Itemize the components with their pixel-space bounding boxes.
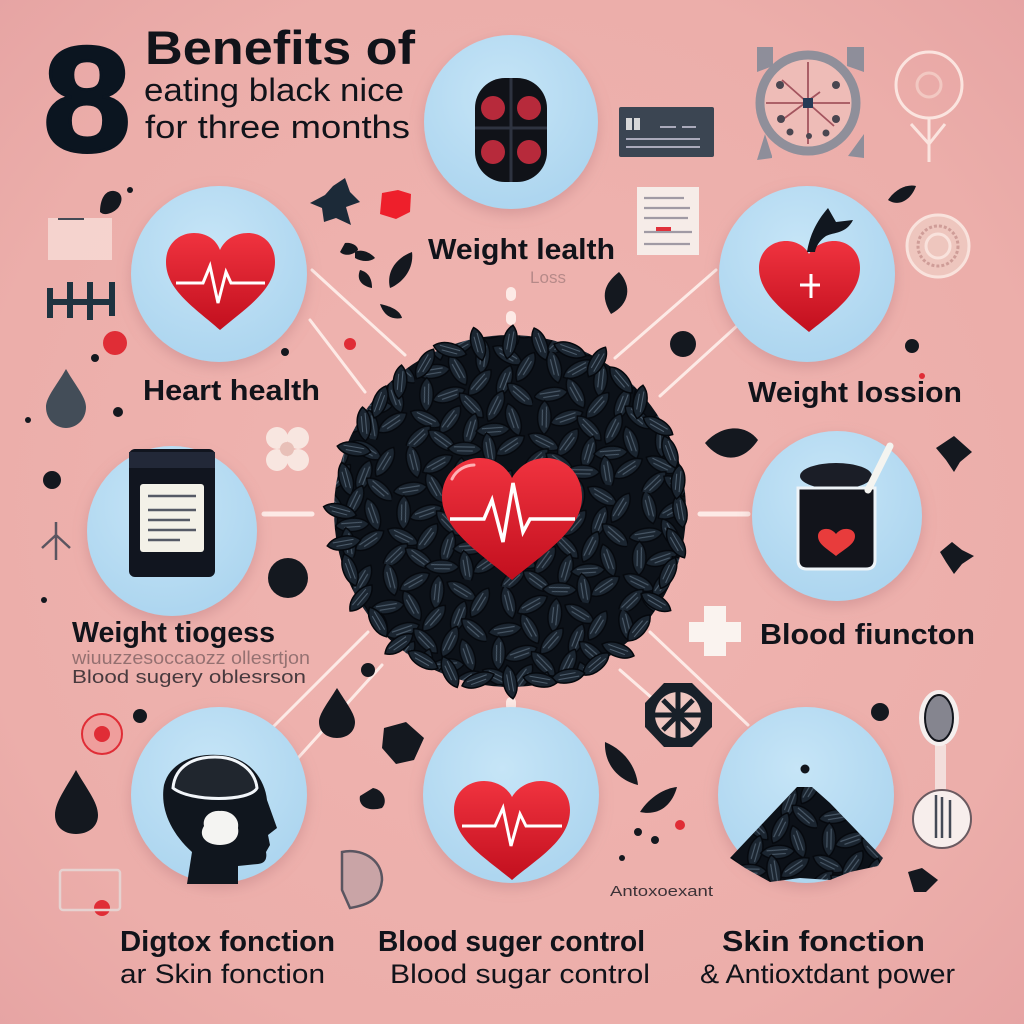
label: skin function [700, 926, 955, 989]
label: skin function: & Antioxtdant power [700, 959, 955, 989]
decorative flower [266, 427, 309, 471]
decorative spoon [913, 690, 971, 848]
label: blood sugar control: Blood sugar control [390, 959, 650, 989]
dark card [619, 107, 714, 157]
icon: heart [454, 781, 570, 880]
panel: jar [752, 431, 922, 601]
decorative cross [689, 606, 741, 656]
rice edge grains [322, 324, 690, 700]
sublabel: left: Blood sugery oblesrson [72, 667, 306, 687]
label: blood function: Blood fiuncton [760, 619, 975, 651]
label: digtox function [120, 926, 335, 989]
label: weight loss left: Weight tiogess [72, 617, 275, 649]
red splash [380, 190, 411, 219]
decorative drops and leaves [25, 186, 974, 892]
small label: antioxidant: Antoxoexant [610, 883, 714, 900]
title line 2: eating black nice [144, 72, 404, 108]
icon: jar [798, 446, 890, 569]
heading: weight health: Weight lealth [428, 234, 615, 266]
decorative wheel [645, 683, 712, 747]
panel: rice bag [87, 446, 257, 616]
panel: rice pile [718, 707, 894, 883]
left dark motif [50, 282, 112, 320]
connector lines [258, 270, 748, 758]
bottom motifs [42, 522, 382, 910]
label: digtox function: Digtox fonction [120, 926, 335, 958]
icon: heart [166, 233, 275, 330]
label: heart health: Heart health [143, 375, 320, 407]
panel: apple heart [719, 186, 895, 362]
title numeral: 8 [43, 15, 131, 183]
panel: head [131, 707, 307, 884]
title [43, 15, 415, 183]
icon: rice pile [730, 787, 883, 882]
sublabel: left [71, 648, 310, 687]
decorative flower outline [896, 52, 962, 162]
panel: heart health [131, 186, 307, 362]
panel: top brain [424, 35, 598, 209]
label: skin function: Skin fonction [722, 926, 925, 958]
sublabel: left: wiuuzzesoccaozz ollesrtjon [71, 648, 310, 668]
red accents [82, 331, 925, 916]
label: blood sugar control [378, 926, 650, 989]
paper note [637, 187, 699, 255]
icon: rice bag [129, 449, 215, 577]
icon: apple heart [759, 208, 860, 332]
faint label: Loss [530, 268, 566, 287]
icon: head [163, 755, 277, 884]
left table outline [48, 218, 112, 260]
title line 1: Benefits of [145, 21, 415, 74]
icon: center heart [442, 458, 582, 580]
decorative target [907, 215, 969, 277]
panel: blood sugar heart [423, 707, 599, 883]
dark flower [310, 178, 360, 225]
label: digtox function: ar Skin fonction [120, 959, 325, 989]
decorative clock icon [757, 47, 864, 160]
central rice mound [322, 324, 690, 700]
label: weight loss: Weight lossion [748, 377, 962, 409]
title line 3: for three months [145, 109, 410, 145]
label: blood sugar control: Blood suger control [378, 926, 645, 958]
seed dot [800, 764, 810, 774]
icon: brain [475, 78, 547, 182]
